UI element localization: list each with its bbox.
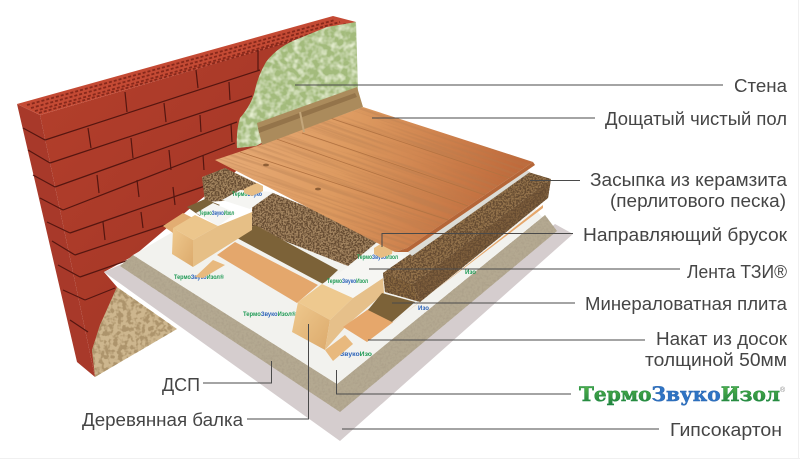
back white tape strips: ТермоЗвукоИзол [199,210,234,217]
white insulation sheet: ТермоЗвукоИзол® [174,273,224,281]
back white tape strips [196,190,274,226]
label: plank floor: Дощатый чистый пол [605,108,787,129]
label: mineral wool: Минераловатная плита [585,293,788,314]
label: gypsum board: Гипсокартон [670,419,782,440]
label: wooden beam: Деревянная балка [82,409,244,430]
ceiling underside [92,287,177,377]
label: board decking: толщиной 50мм [645,349,787,370]
back white tape strips: ТермоЗвуко [232,191,262,198]
gypsum board layer [104,224,573,441]
front white tape strips: ТермоЗвукоИзол [327,278,368,285]
label: chipboard: ДСП [162,374,200,395]
label: TZI tape: Лента ТЗИ® [687,261,787,282]
front wooden beam [292,278,384,361]
wall top face with hollow brick holes [17,16,356,115]
middle mineral wool [237,225,338,284]
logo: ТермоЗвукоИзол [579,382,780,406]
label: board decking [645,328,788,370]
label: guide batten: Направляющий брусок [583,224,788,245]
white insulation sheet: Изо [418,305,429,312]
label: expanded clay backfill [590,169,788,211]
back wooden beam [172,212,252,278]
wall end face [17,104,95,377]
baseboard [257,87,363,145]
label: wall: Стена [734,75,788,96]
wall front face [40,22,356,377]
back plank [163,213,193,233]
label: expanded clay backfill: (перлитового песка) [610,190,786,211]
white insulation sheet [133,200,542,384]
front white tape strips [322,250,405,298]
label: board decking: Накат из досок [656,328,788,349]
right expanded clay block [383,172,551,302]
back expanded clay block [202,168,258,202]
middle board decking [217,242,318,303]
back mineral wool [187,199,220,216]
sheet logos: ТермоЗвукоИзол® [243,310,296,318]
brick wall [17,16,356,377]
label: expanded clay backfill: Засыпка из керамзита [590,169,788,190]
front white tape strips: ТермоЗвукоИзол [357,254,398,261]
front guide batten [374,243,393,258]
white insulation sheet: Изо [465,269,476,276]
light strip under floor [408,170,530,256]
back guide batten [244,183,263,196]
logo: ® [780,386,786,394]
chipboard layer [120,215,557,412]
leader lines [203,85,723,429]
middle expanded clay block [252,193,382,266]
white insulation sheet: ЗвукоИзо [340,351,372,358]
right mineral wool [368,293,415,322]
plank floor [215,107,535,252]
right board decking [343,205,543,342]
green wall plaster [237,22,358,148]
